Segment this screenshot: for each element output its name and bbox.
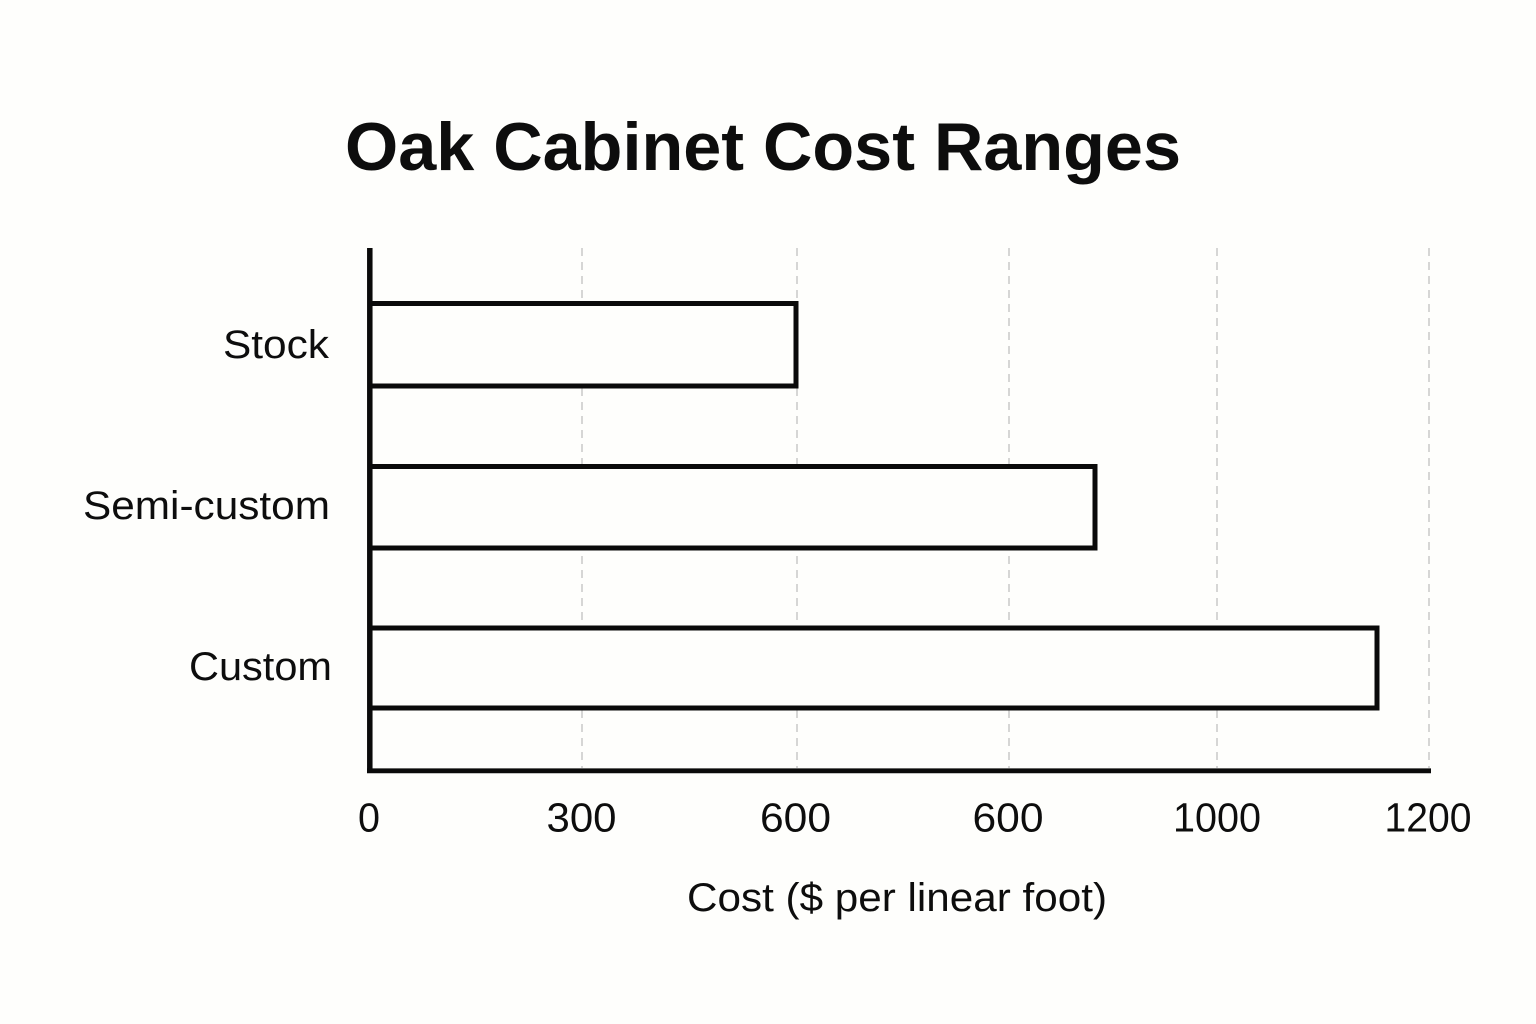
x axis tick labels: 0	[358, 794, 380, 840]
bar: Stock	[370, 304, 796, 386]
x axis tick labels: 1200	[1384, 794, 1472, 840]
bar: Semi-custom	[370, 466, 1095, 548]
bar: Custom	[370, 628, 1377, 708]
x axis tick labels: 600	[760, 794, 831, 840]
category labels: Custom	[189, 645, 332, 689]
category labels: Semi-custom	[83, 484, 330, 528]
x axis title: Cost ($ per linear foot)	[687, 876, 1107, 920]
x axis tick labels: 1000	[1173, 794, 1261, 840]
y axis	[367, 248, 373, 773]
x axis tick labels: 600	[972, 794, 1044, 840]
title: Oak Cabinet Cost Ranges	[345, 109, 1181, 185]
category labels	[83, 323, 332, 689]
x axis tick labels: 300	[546, 794, 616, 840]
x axis	[367, 768, 1431, 773]
category labels: Stock	[223, 323, 330, 367]
x axis tick labels	[358, 794, 1472, 840]
